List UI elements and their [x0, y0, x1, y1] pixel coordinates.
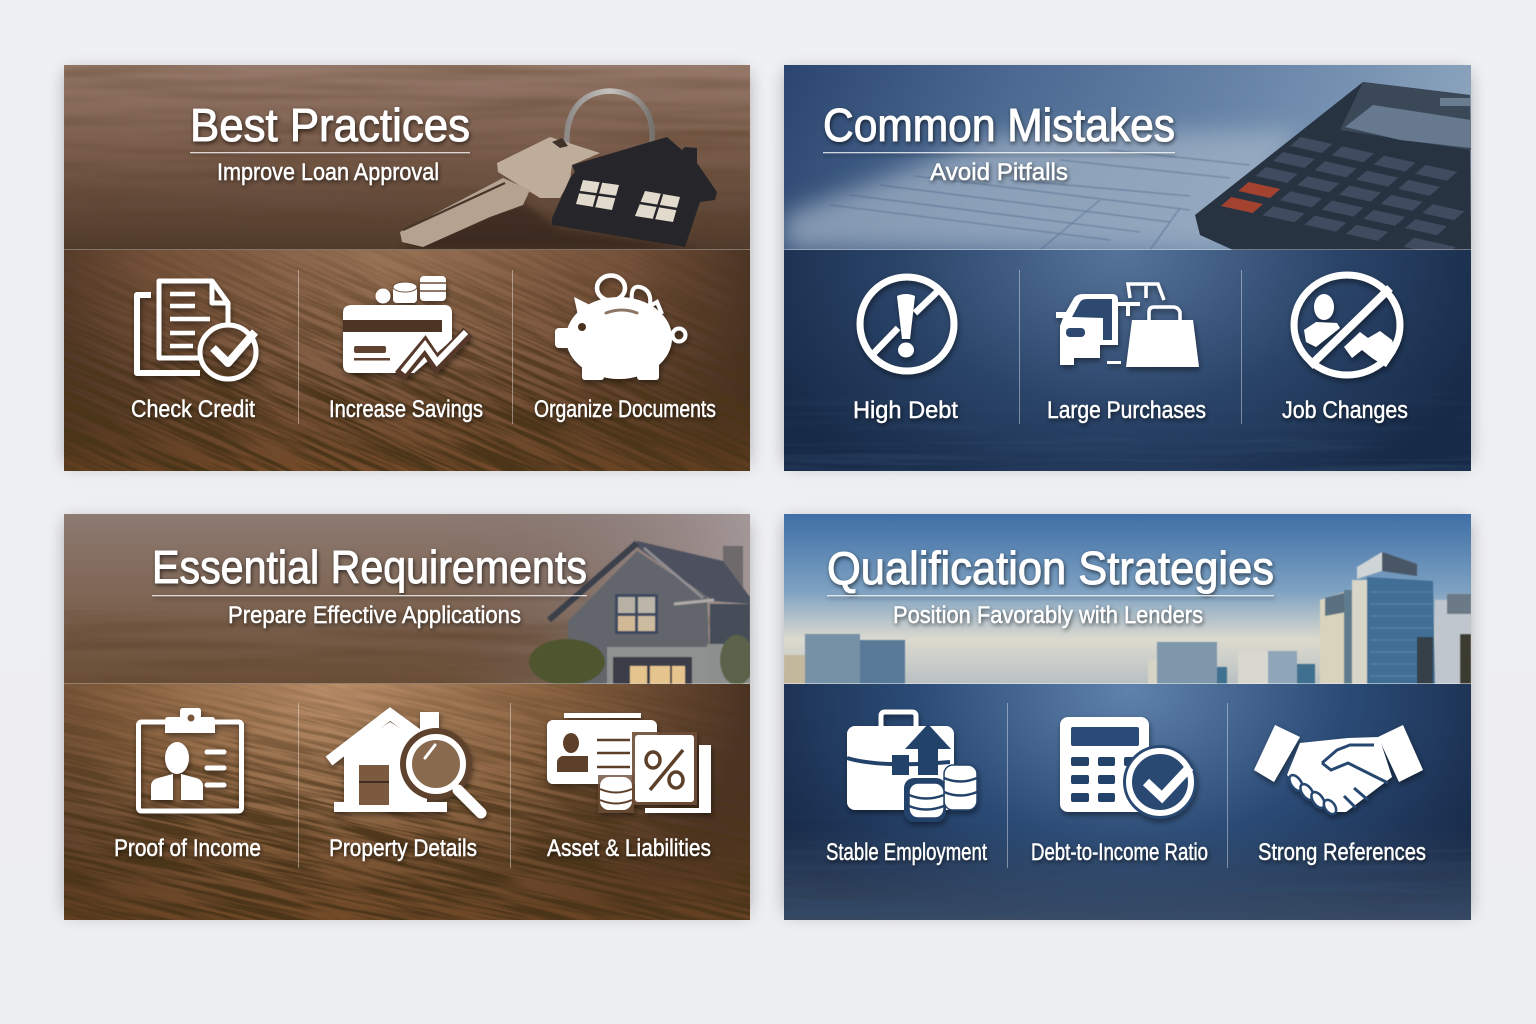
heading: best practices — [190, 99, 470, 186]
label: increase savings: Increase Savings — [329, 396, 483, 423]
icon: high debt — [860, 277, 954, 371]
heading: common mistakes: Avoid Pitfalls — [930, 159, 1068, 186]
heading: common mistakes: Common Mistakes — [823, 99, 1175, 151]
heading: best practices: Best Practices — [190, 99, 470, 151]
heading: qualification strategies — [827, 542, 1274, 629]
icon: stable employment — [847, 712, 977, 822]
icon: debt-to-income ratio — [1060, 717, 1197, 819]
header photo: city skyline — [784, 514, 1471, 684]
heading: qualification strategies: Position Favorably with Lenders — [893, 602, 1203, 629]
heading: best practices: Improve Loan Approval — [217, 159, 439, 186]
icon: job changes — [1294, 275, 1400, 375]
label: check credit: Check Credit — [131, 396, 255, 423]
heading: essential requirements — [152, 541, 587, 629]
icon: increase savings — [343, 276, 468, 376]
heading: common mistakes — [823, 99, 1175, 186]
icon: property details — [329, 712, 481, 813]
label: large purchases: Large Purchases — [1047, 397, 1206, 424]
divider — [1019, 270, 1020, 424]
divider — [1241, 270, 1242, 424]
lower navy panel — [784, 684, 1471, 920]
lower wood panel — [64, 250, 750, 471]
heading: essential requirements: Prepare Effective Applications — [228, 602, 521, 629]
lower navy panel — [784, 250, 1471, 471]
divider — [512, 270, 513, 424]
panel: essential requirements — [64, 514, 754, 920]
heading: essential requirements: Essential Requirements — [152, 541, 587, 593]
label: organize documents: Organize Documents — [534, 396, 716, 423]
label: stable employment: Stable Employment — [826, 839, 987, 866]
header photo: calculator on paperwork — [784, 65, 1471, 250]
label: proof of income: Proof of Income — [114, 835, 261, 862]
icon: check credit — [137, 281, 256, 379]
icon: handshake — [1254, 725, 1423, 816]
icon: proof of income — [138, 708, 242, 811]
divider — [510, 703, 511, 868]
divider — [298, 270, 299, 424]
panel: common mistakes — [784, 65, 1525, 471]
icon: large purchases — [1056, 284, 1199, 367]
label: debt-to-income ratio: Debt-to-Income Ratio — [1031, 839, 1208, 866]
label: high debt: High Debt — [853, 397, 958, 424]
heading: qualification strategies: Qualification Strategies — [827, 542, 1274, 594]
lower wood panel — [64, 684, 750, 920]
label: strong references: Strong References — [1258, 839, 1426, 866]
panel: qualification strategies — [784, 514, 1471, 920]
label: job changes: Job Changes — [1282, 397, 1408, 424]
divider — [1007, 703, 1008, 868]
header photo: wood table with house key — [64, 65, 750, 250]
panel: best practices — [64, 65, 750, 471]
divider — [298, 703, 299, 868]
divider — [1227, 703, 1228, 868]
label: asset and liabilities: Asset & Liabilities — [547, 835, 711, 862]
label: property details: Property Details — [329, 835, 477, 862]
icon: assets and liabilities — [547, 713, 711, 813]
header photo: house on field — [64, 514, 754, 685]
icon: piggy bank — [555, 276, 686, 380]
